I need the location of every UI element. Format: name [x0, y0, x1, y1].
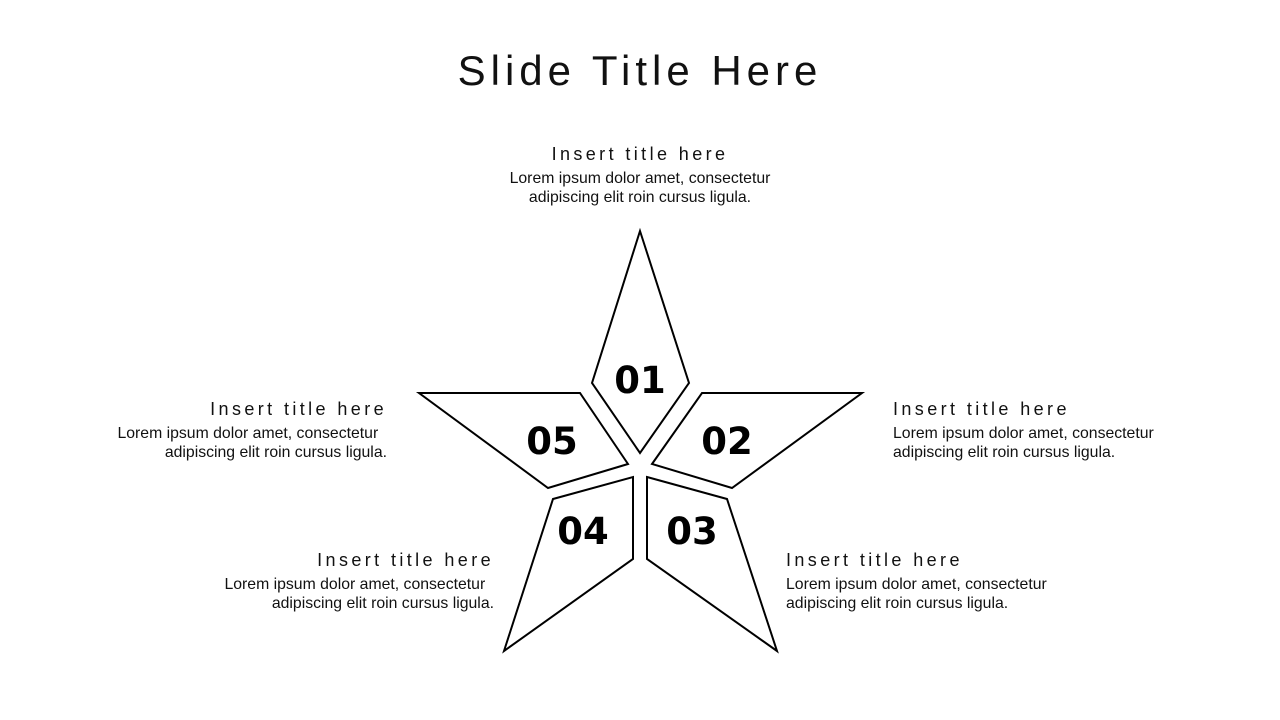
- piece 04: 04: [557, 510, 609, 553]
- text: item 04: adipiscing elit roin cursus ligula.: [272, 595, 494, 612]
- text: item 02: [893, 399, 1154, 461]
- piece 01: [592, 231, 689, 453]
- text: item 03: adipiscing elit roin cursus ligula.: [786, 595, 1008, 612]
- text: item 02: Insert title here: [893, 399, 1070, 419]
- piece 05: 05: [526, 420, 578, 463]
- piece 02: 02: [701, 420, 753, 463]
- piece 03: [647, 477, 777, 651]
- piece 04: [504, 477, 633, 651]
- text: item 03: Insert title here: [786, 550, 963, 570]
- text: item 01: [510, 144, 770, 206]
- text: item 05: Insert title here: [210, 399, 387, 419]
- text: item 04: Insert title here: [317, 550, 494, 570]
- text: item 04: Lorem ipsum dolor amet, consectetur: [224, 576, 485, 593]
- piece 03: 03: [666, 510, 718, 553]
- text: item 01: Insert title here: [552, 144, 728, 164]
- text: item 03: [786, 550, 1047, 612]
- text: item 05: adipiscing elit roin cursus ligula.: [165, 444, 387, 461]
- text: item 05: [117, 399, 387, 461]
- piece 02: [652, 393, 862, 488]
- text: item 04: [224, 550, 494, 612]
- text: item 01: adipiscing elit roin cursus ligula.: [529, 189, 751, 206]
- text: item 05: Lorem ipsum dolor amet, consectetur: [117, 425, 378, 442]
- piece 05: [419, 393, 628, 488]
- title: Slide Title Here: [458, 47, 822, 94]
- piece 01: 01: [614, 359, 666, 402]
- text: item 02: adipiscing elit roin cursus ligula.: [893, 444, 1115, 461]
- text: item 02: Lorem ipsum dolor amet, consectetur: [893, 425, 1154, 442]
- text: item 03: Lorem ipsum dolor amet, consectetur: [786, 576, 1047, 593]
- text: item 01: Lorem ipsum dolor amet, consectetur: [510, 170, 770, 187]
